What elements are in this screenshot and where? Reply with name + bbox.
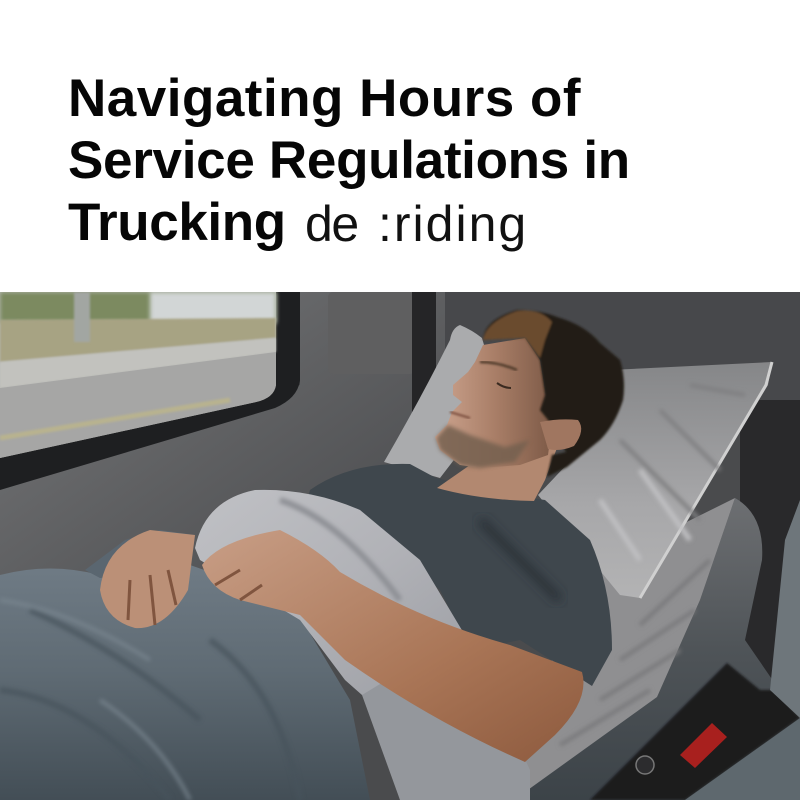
ear (540, 419, 581, 450)
pillow (538, 362, 772, 598)
arms and hands (100, 530, 583, 762)
cab wall (0, 292, 800, 800)
title: :riding (378, 196, 528, 252)
shirt (300, 464, 612, 686)
title: Service Regulations in (68, 131, 630, 190)
head and neck (435, 338, 560, 501)
hair (483, 310, 624, 477)
blanket (0, 530, 370, 800)
title: Navigating Hours of (68, 69, 581, 128)
title (68, 69, 630, 252)
title: de (305, 196, 358, 252)
blanket fold (195, 490, 530, 800)
window (0, 292, 300, 490)
title: Trucking (68, 193, 286, 252)
seat bolster and console (520, 498, 800, 800)
photo: driver sleeping in truck cab (0, 292, 800, 800)
sheet (490, 498, 735, 792)
back pillow (384, 325, 500, 478)
